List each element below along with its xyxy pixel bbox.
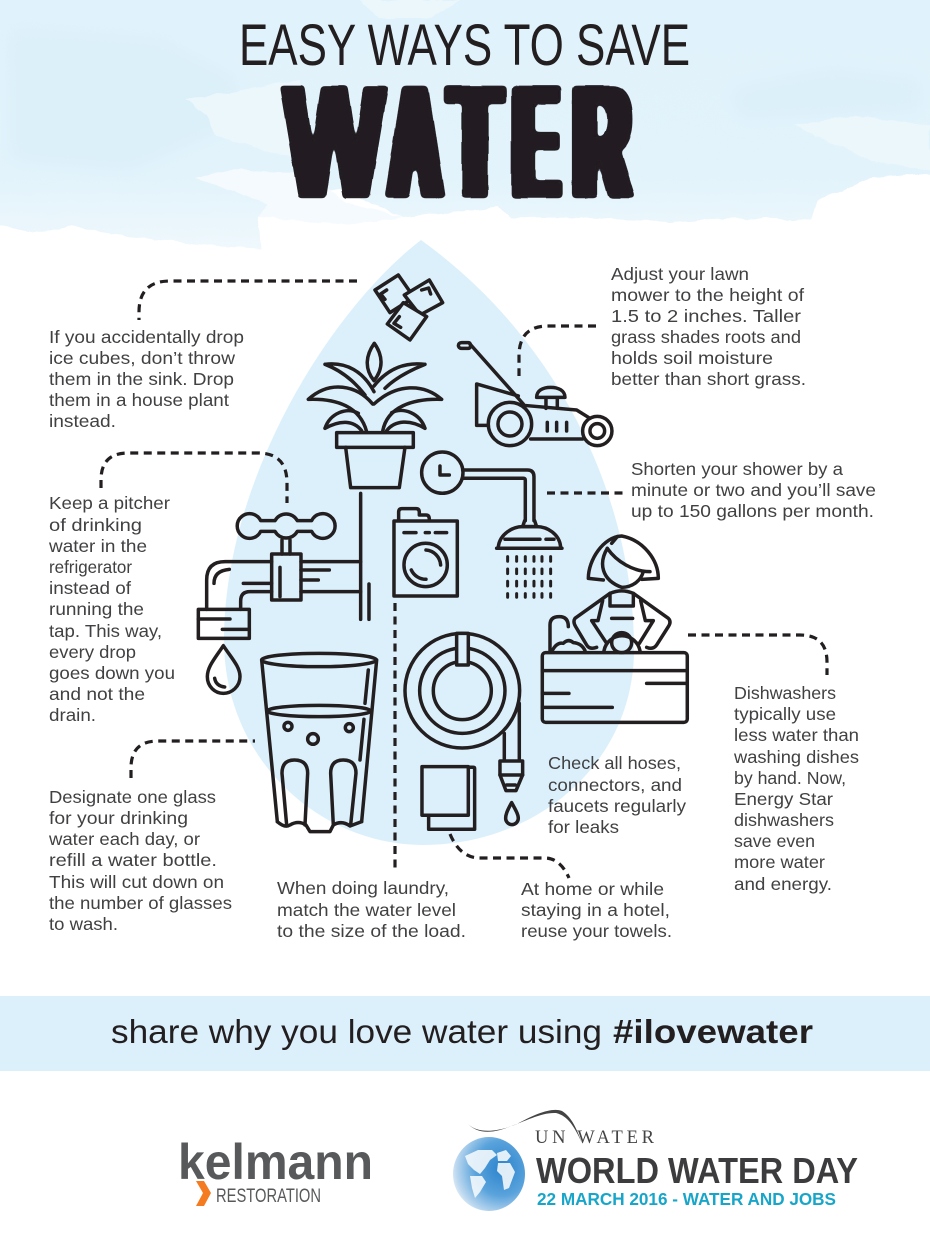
text: glass tip: the number of glasses (49, 893, 232, 913)
icon: orange chevron (196, 1181, 211, 1206)
text: lawn mower tip: Adjust your lawn (611, 264, 749, 284)
leader: glass (131, 741, 255, 778)
text: dishwasher tip: more water (734, 852, 825, 872)
icon: house plant (308, 343, 442, 488)
text: pitcher tip: refrigerator (49, 557, 132, 577)
icon: timer clock (422, 452, 463, 493)
text: glass tip: refill a water bottle. (49, 850, 217, 870)
icon: shower (422, 452, 562, 597)
leader: laundry (393, 603, 397, 872)
icon: pipes and faucet (198, 493, 369, 693)
text: hoses tip: for leaks (548, 817, 619, 837)
text: ice cubes tip: them in the sink. Drop (49, 369, 234, 389)
icon: ice cubes (375, 275, 443, 340)
leader: towels (450, 834, 569, 878)
text: shower tip: Shorten your shower by a (631, 459, 843, 479)
heading: water: W (284, 50, 384, 233)
text: lawn mower tip: better than short grass. (611, 369, 806, 389)
heading: water: T (450, 50, 500, 233)
icon: swoosh (468, 1110, 582, 1143)
text: un water: UN WATER (535, 1128, 655, 1148)
text: towels tip (521, 879, 672, 941)
banner: share hashtag (0, 996, 930, 1071)
text: ice cubes tip: If you accidentally drop (49, 327, 244, 347)
text: lawn mower tip: mower to the height of (611, 285, 804, 305)
text: hoses tip: connectors, and (548, 775, 682, 795)
banner text (111, 1013, 813, 1050)
icon: person washing dishes (550, 536, 670, 653)
leader: dishwasher (688, 635, 827, 675)
heading: water: E (514, 50, 558, 233)
text: lawn mower tip: grass shades roots and (611, 327, 801, 347)
text: pitcher tip (48, 493, 175, 725)
text: glass tip (48, 787, 232, 934)
text: dishwasher tip: save even (734, 831, 815, 851)
text: glass tip: for your drinking (49, 808, 188, 828)
text: pitcher tip: every drop (49, 642, 136, 662)
text: lawn mower tip: holds soil moisture (611, 348, 773, 368)
text: dishwasher tip: less water than (734, 725, 859, 745)
text: pitcher tip: drain. (49, 705, 96, 725)
leader: ice cubes (139, 281, 357, 320)
watercolor background (0, 0, 930, 248)
text: towels tip: staying in a hotel, (521, 900, 670, 920)
text: pitcher tip: instead of (49, 578, 131, 598)
text: shower tip: minute or two and you’ll save (631, 480, 876, 500)
text: glass tip: water each day, or (48, 829, 200, 849)
text: pitcher tip: tap. This way, (49, 621, 162, 641)
text: pitcher tip: and not the (49, 684, 145, 704)
title (239, 13, 690, 233)
text: dishwasher tip: Energy Star (734, 789, 833, 809)
logo: un water world water day (453, 1110, 858, 1211)
text: dishwasher tip: Dishwashers (734, 683, 836, 703)
text: laundry tip (277, 878, 466, 941)
text: glass tip: Designate one glass (49, 787, 216, 807)
heading: easy ways to save: EASY WAYS TO SAVE (239, 13, 690, 78)
banner text: share why you love water using (111, 1013, 602, 1050)
icon: globe (453, 1137, 525, 1211)
text: glass tip: This will cut down on (49, 872, 224, 892)
text: hoses tip: Check all hoses, (548, 753, 681, 773)
icon: lawn mower (458, 343, 612, 446)
icon: kitchen sink (542, 653, 687, 722)
text: pitcher tip: goes down you (49, 663, 175, 683)
heading: water (284, 50, 630, 233)
text: shower tip (631, 459, 876, 521)
text: dishwasher tip: and energy. (734, 874, 832, 894)
water drop background (224, 240, 634, 845)
text: laundry tip: When doing laundry, (277, 878, 449, 898)
text: hoses tip: faucets regularly (548, 796, 686, 816)
text: towels tip: reuse your towels. (521, 921, 672, 941)
text: laundry tip: match the water level (277, 900, 456, 920)
text: laundry tip: to the size of the load. (277, 921, 466, 941)
text: ice cubes tip: ice cubes, don’t throw (49, 348, 235, 368)
text: glass tip: to wash. (49, 914, 118, 934)
text: world water day: WORLD WATER DAY (536, 1150, 858, 1191)
icon: hose (405, 633, 523, 825)
text: towels tip: At home or while (521, 879, 664, 899)
text: ice cubes tip: instead. (49, 411, 116, 431)
heading: water: A (390, 50, 440, 233)
text: dishwasher tip: typically use (734, 704, 836, 724)
text: ice cubes tip (49, 327, 244, 431)
text: shower tip: up to 150 gallons per month. (631, 501, 874, 521)
text: hoses tip (548, 753, 686, 837)
logo: kelmann restoration: RESTORATION (216, 1186, 321, 1207)
icon: washing machine (394, 509, 457, 596)
text: dishwasher tip (733, 683, 859, 894)
text: event date: 22 MARCH 2016 - WATER AND JOBS (537, 1189, 836, 1209)
leader: shower (547, 491, 624, 495)
text: pitcher tip: water in the (48, 536, 147, 556)
text: dishwasher tip: by hand. Now, (734, 768, 846, 788)
text: pitcher tip: Keep a pitcher (49, 493, 170, 513)
title: R (574, 50, 630, 233)
text: dishwasher tip: washing dishes (733, 747, 859, 767)
logo: kelmann restoration: kelmann (178, 1134, 373, 1190)
banner text: #ilovewater (613, 1013, 813, 1050)
text: ice cubes tip: them in a house plant (49, 390, 229, 410)
leader: faucet (101, 453, 287, 503)
text: pitcher tip: of drinking (49, 515, 142, 535)
text: lawn mower tip: 1.5 to 2 inches. Taller (611, 306, 801, 326)
icon: towels (422, 767, 475, 829)
icon: drinking glass (262, 653, 377, 832)
text: dishwasher tip: dishwashers (734, 810, 834, 830)
text: lawn mower tip (611, 264, 806, 389)
leader: lawn mower (519, 326, 596, 376)
text: pitcher tip: running the (49, 599, 144, 619)
